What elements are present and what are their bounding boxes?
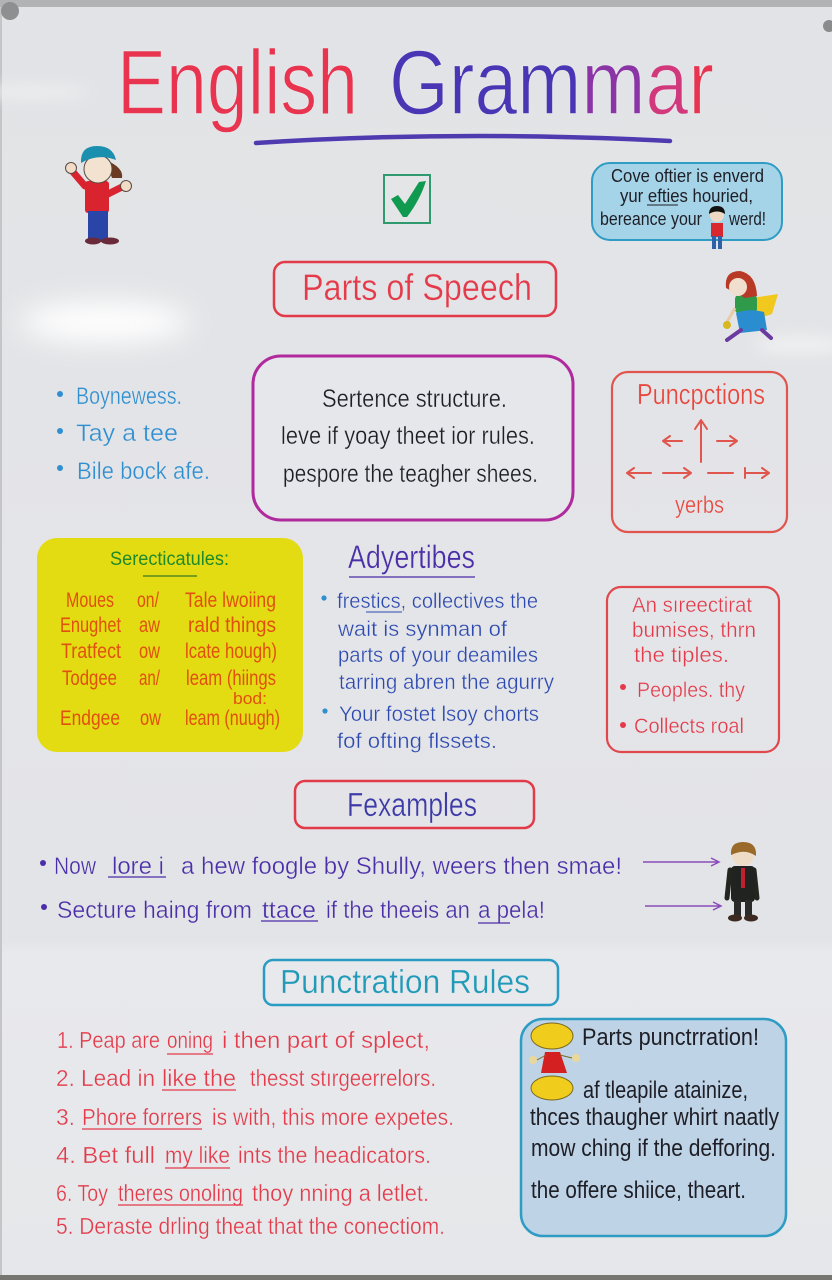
text block: adverbs list: wait is synman of (337, 618, 507, 641)
callout: blue speech box: yur efties houried, (620, 186, 753, 206)
panel: sentence structure: leve if yoay theet ior rules. (281, 422, 535, 450)
panel: red notes (607, 587, 779, 752)
heading: Examples: Fexamples (347, 786, 477, 823)
example sentence 1 with arrow: lore i (112, 853, 164, 880)
panel: sentence structure: Sertence structure. (322, 385, 507, 413)
list: punctuation rules: thesst stırgeerrelors. (250, 1065, 436, 1091)
example sentence 2 with arrow: ttace (262, 897, 316, 924)
title (117, 32, 714, 134)
panel: sentence structure: pespore the teagher shees. (283, 460, 538, 488)
list: blue bullets: Boynewess. (76, 383, 182, 410)
callout: blue speech box: Cove oftier is enverd (611, 166, 764, 186)
icon: green check box (384, 175, 430, 223)
example sentence 1 with arrow: a hew foogle by Shully, weers then smae! (181, 853, 622, 880)
list: punctuation rules: ints the headicators. (238, 1142, 431, 1168)
panel: yellow table: aw (139, 614, 161, 637)
icon: student in dark suit (727, 842, 758, 922)
panel: yellow table: lcate hough) (185, 640, 277, 663)
panel: yellow table: Serecticatules: (110, 549, 229, 570)
example sentence 2 with arrow: a pela! (478, 897, 545, 924)
callout: blue speech box: bereance your (600, 209, 702, 229)
panel: yellow table: leam (hiings (186, 667, 276, 690)
heading: Parts of Speech: Parts of Speech (302, 267, 532, 308)
text block: adverbs list: tarring abren the agurry (339, 671, 554, 694)
title: Grammar (389, 32, 714, 134)
text block: adverbs list (321, 590, 554, 753)
panel: yellow table: Moues (66, 589, 114, 612)
panel: yellow table: Endgee (60, 707, 120, 730)
panel: parts punctuation (521, 1019, 786, 1236)
panel: sentence structure (253, 356, 573, 520)
panel: parts punctuation: thces thaugher whirt naatly (530, 1104, 779, 1131)
panel: parts punctuation: af tleapile atainize, (583, 1077, 748, 1104)
panel: yellow table: ow (139, 640, 161, 663)
text block: adverbs list: frestics, collectives the (337, 590, 538, 613)
heading: Adyertibes: Adyertibes (348, 539, 475, 575)
list: punctuation rules: thoy nning a letlet. (252, 1180, 429, 1206)
list: punctuation rules: theres onoling (118, 1180, 243, 1206)
list: punctuation rules: 1. Peap are (57, 1027, 160, 1053)
panel: parts punctuation: the offere shiice, theart. (531, 1177, 746, 1204)
panel: yellow table: Todgee (62, 667, 117, 690)
panel: yellow table: an/ (139, 667, 160, 690)
panel: yellow table: rald things (188, 614, 276, 637)
list: blue bullets: Tay a tee (76, 420, 178, 447)
list: punctuation rules: my like (165, 1142, 230, 1168)
text block: adverbs list: Your fostet lsoy chorts (339, 703, 539, 726)
icon: running child with cape (723, 271, 778, 340)
callout: blue speech box (592, 163, 782, 249)
panel: yellow table: ow (140, 707, 162, 730)
example sentence 1 with arrow (40, 853, 719, 880)
list: punctuation rules: 5. Deraste drling theat that the conectiom. (56, 1213, 445, 1239)
example sentence 1 with arrow: Now (54, 853, 97, 880)
list: punctuation rules (56, 1027, 454, 1239)
list: punctuation rules: oning (167, 1027, 213, 1053)
panel: punctuation arrows: Puncpctions (637, 379, 765, 411)
text block: adverbs list: parts of your deamiles (338, 644, 538, 667)
list: blue bullets: Bile bock afe. (77, 458, 210, 485)
list: punctuation rules: i then part of splect, (222, 1027, 430, 1053)
panel: red notes: the tiples. (634, 644, 729, 667)
list: punctuation rules: 3. (56, 1104, 75, 1130)
panel: parts punctuation: Parts punctrration! (582, 1024, 759, 1051)
list: punctuation rules: like the (162, 1065, 236, 1091)
list: punctuation rules: 2. Lead in (56, 1065, 155, 1091)
panel: red notes: Collects roal (634, 715, 744, 738)
list: punctuation rules: 6. Toy (56, 1180, 108, 1206)
list: blue bullets (57, 383, 210, 485)
panel: punctuation arrows: yerbs (675, 492, 724, 519)
panel: punctuation arrows (612, 372, 787, 532)
title underline (256, 136, 670, 143)
arrows diagram (627, 420, 769, 478)
callout: blue speech box: werd! (728, 209, 766, 229)
example sentence 2 with arrow: Secture haing from (57, 897, 252, 924)
panel: yellow table: leam (nuugh) (185, 707, 280, 730)
icon: waving child with blue cap (66, 146, 132, 244)
panel: red notes: bumises, thrn (632, 619, 756, 642)
list: punctuation rules: 4. Bet full (56, 1142, 155, 1168)
panel: red notes: An sıreectirat (632, 594, 752, 617)
panel: red notes: Peoples. thy (637, 679, 745, 702)
heading: Examples (295, 781, 534, 828)
example sentence 2 with arrow (41, 897, 721, 924)
heading: Punctuation Rules: Punctration Rules (280, 963, 530, 1000)
panel: yellow table (37, 538, 303, 752)
list: punctuation rules: is with, this more expetes. (212, 1104, 454, 1130)
panel: yellow table: Tratfect (61, 640, 121, 663)
example sentence 2 with arrow: if the theeis an (326, 897, 470, 924)
icon: small boy in callout (709, 206, 725, 249)
panel: yellow table: on/ (137, 589, 159, 612)
panel: yellow table: Tale lwoiing (185, 589, 276, 612)
list: punctuation rules: Phore forrers (82, 1104, 202, 1130)
text block: adverbs list: fof ofting flssets. (337, 730, 497, 753)
icon: yellow faces with red figure (529, 1023, 580, 1100)
panel: yellow table: bod: (233, 689, 267, 708)
panel: yellow table: Enughet (60, 614, 121, 637)
panel: parts punctuation: mow ching if the defforing. (531, 1135, 776, 1162)
heading: Parts of Speech (274, 262, 556, 316)
title: English (117, 32, 358, 134)
